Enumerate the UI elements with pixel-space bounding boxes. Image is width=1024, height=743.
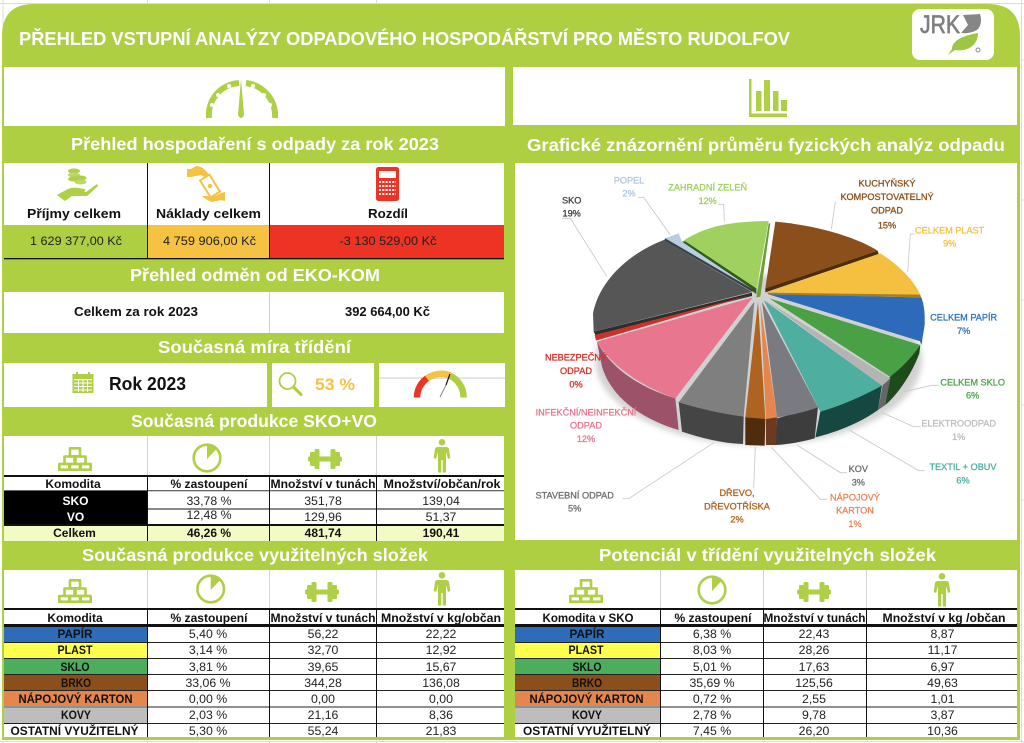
label: dřevo: DŘEVOTŘÍSKA xyxy=(704,501,771,511)
heading: graf: Grafické znázornění průměru fyzických analýz odpadu xyxy=(527,135,1005,155)
label: stavební odpad xyxy=(535,490,614,514)
icon: pie xyxy=(699,577,725,603)
table text xyxy=(45,477,501,540)
table text: 32,70 xyxy=(308,643,339,657)
table text: % zastoupení xyxy=(674,611,752,625)
label: elektroodpad xyxy=(921,419,996,442)
label: dřevo: 2% xyxy=(730,515,744,525)
label: nápojový karton: 1% xyxy=(848,519,862,529)
table text: BRKO xyxy=(61,676,91,690)
text: náklady value: 4 759 906,00 Kč xyxy=(163,234,256,248)
label: textil: 6% xyxy=(956,475,970,485)
table text: Množství v tunách xyxy=(764,611,866,625)
table text: 51,37 xyxy=(426,510,457,524)
table text: 5,30 % xyxy=(189,724,227,738)
table text: NÁPOJOVÝ KARTON xyxy=(530,691,644,706)
table: potenciál xyxy=(515,570,1017,738)
label: nebezpečný odpad: ODPAD xyxy=(560,366,592,376)
table text: 2,03 % xyxy=(189,708,227,722)
table text: PAPÍR xyxy=(570,626,605,641)
icon: magnifier xyxy=(280,373,301,394)
label: nápojový karton xyxy=(830,492,880,529)
table text: 15,67 xyxy=(426,660,457,674)
panel: EKO-KOM xyxy=(4,292,504,333)
label: SKO xyxy=(562,195,581,219)
leader lines xyxy=(562,197,939,499)
icon: pie xyxy=(197,576,224,602)
heading: využitelné složky: Současná produkce využitelných složek xyxy=(82,545,428,565)
label: infekční odpad xyxy=(536,407,637,444)
table text: 35,69 % xyxy=(689,676,735,690)
label: kuchyňský odpad: KOMPOSTOVATELNÝ xyxy=(840,192,934,202)
table text: 21,16 xyxy=(308,708,339,722)
label: kuchyňský odpad: 15% xyxy=(878,220,896,230)
label: sklo: 6% xyxy=(966,391,979,401)
panel: hospodaření xyxy=(4,163,504,259)
table text: 9,78 xyxy=(802,708,826,722)
label: zahradní zeleň: ZAHRADNÍ ZELEŇ xyxy=(668,183,747,193)
table text: 6,97 xyxy=(931,660,955,674)
table text: 3,81 % xyxy=(189,660,227,674)
table text: 0,00 xyxy=(311,692,335,706)
table text: 0,00 % xyxy=(189,692,227,706)
table text: 33,06 % xyxy=(185,676,231,690)
table text: 8,36 xyxy=(429,708,453,722)
table text xyxy=(523,611,1006,738)
table text: 139,04 xyxy=(422,494,460,508)
table text: Množství v tunách xyxy=(270,611,376,625)
label: papír xyxy=(930,313,998,336)
label: infekční odpad: 12% xyxy=(577,434,595,444)
table text: NÁPOJOVÝ KARTON xyxy=(18,691,132,706)
label: dřevo xyxy=(704,488,771,525)
table text: 12,92 xyxy=(426,643,457,657)
table text: SKLO xyxy=(572,660,602,674)
table text: 11,17 xyxy=(928,643,958,657)
table text: 49,63 xyxy=(927,676,958,690)
icon: person xyxy=(434,439,450,472)
icon: pie xyxy=(194,445,220,471)
text: celkem label: Celkem za rok 2023 xyxy=(74,305,198,319)
heading: potenciál: Potenciál v třídění využitelných složek xyxy=(599,545,936,565)
table text: % zastoupení xyxy=(170,477,248,491)
label: elektroodpad: 1% xyxy=(952,432,965,442)
icon: gold bars xyxy=(570,580,602,602)
panel: gauge icon xyxy=(4,67,505,126)
label: nebezpečný odpad: 0% xyxy=(569,379,583,389)
table: současná produkce xyxy=(4,570,504,738)
table text: 136,08 xyxy=(422,676,460,690)
table text: 17,63 xyxy=(799,660,830,674)
icon: money hands xyxy=(187,166,225,202)
table text: Celkem xyxy=(53,526,96,540)
table text: Komodita xyxy=(47,611,103,625)
label: plast: 9% xyxy=(943,239,956,249)
table text: OSTATNÍ VYUŽITELNÝ xyxy=(10,723,138,738)
text: rok 2023: Rok 2023 xyxy=(109,374,186,394)
icon: bar chart xyxy=(749,79,787,117)
icon: dumbbell xyxy=(797,582,831,602)
label: kuchyňský odpad xyxy=(840,179,934,230)
table text: 39,65 xyxy=(308,660,339,674)
table text: 10,36 xyxy=(927,724,958,738)
table text: 56,22 xyxy=(308,627,339,641)
table text: 22,22 xyxy=(426,627,457,641)
table text: 190,41 xyxy=(423,526,460,540)
logo JRK xyxy=(912,9,994,60)
label: popel xyxy=(614,175,644,199)
table text: 0,00 xyxy=(429,692,453,706)
table text: 344,28 xyxy=(304,676,342,690)
label: sklo: CELKEM SKLO xyxy=(940,377,1005,387)
table text: 2,78 % xyxy=(693,708,731,722)
table text: 55,24 xyxy=(308,724,339,738)
table text: 351,78 xyxy=(304,494,342,508)
table text: % zastoupení xyxy=(170,611,248,625)
panel: pie chart xyxy=(515,163,1017,540)
table text: VO xyxy=(67,510,84,524)
table text: Komodita v SKO xyxy=(542,611,634,625)
table text: SKLO xyxy=(60,660,90,674)
label: nebezpečný odpad: NEBEZPEČNÝ xyxy=(545,353,607,363)
table text: 0,72 % xyxy=(693,692,731,706)
logo JRK: JRK xyxy=(920,11,960,39)
icon: person xyxy=(434,572,450,606)
table text: 5,01 % xyxy=(693,660,731,674)
icon: gold bars xyxy=(59,580,91,602)
table text: 3,87 xyxy=(931,708,955,722)
table text: Množství/občan/rok xyxy=(384,477,501,491)
table text: PLAST xyxy=(568,643,604,657)
icon: dumbbell xyxy=(305,582,339,602)
table text: 33,78 % xyxy=(186,494,232,508)
table text: KOVY xyxy=(572,708,602,722)
text: 53 %: 53 % xyxy=(315,375,355,394)
label: kuchyňský odpad: KUCHYŇSKÝ xyxy=(858,179,915,189)
label: zahradní zeleň: 12% xyxy=(699,196,717,206)
label: stavební odpad: STAVEBNÍ ODPAD xyxy=(535,490,614,500)
heading: produkce SKO+VO: Současná produkce SKO+VO xyxy=(131,411,377,431)
table text: 26,20 xyxy=(799,724,830,738)
table text: OSTATNÍ VYUŽITELNÝ xyxy=(523,723,651,738)
heading: hospodaření: Přehled hospodaření s odpady za rok 2023 xyxy=(71,134,439,154)
label: dřevo: DŘEVO, xyxy=(719,488,755,498)
label: textil: TEXTIL + OBUV xyxy=(929,462,997,472)
heading: EKO-KOM: Přehled odměn od EKO-KOM xyxy=(130,265,380,285)
text: příjmy value: 1 629 377,00 Kč xyxy=(30,234,122,248)
icon: calculator xyxy=(376,167,399,201)
table text: 8,03 % xyxy=(693,643,731,657)
table text: 7,45 % xyxy=(693,724,731,738)
table text: 6,38 % xyxy=(693,627,731,641)
label: SKO: SKO xyxy=(562,195,581,205)
table text: SKO xyxy=(62,494,89,508)
icon: speedometer xyxy=(209,79,275,118)
text: rozdíl label: Rozdíl xyxy=(368,207,408,221)
label: SKO: 19% xyxy=(563,209,581,219)
table text: KOVY xyxy=(61,708,91,722)
table text: 5,40 % xyxy=(189,627,227,641)
table text xyxy=(10,611,501,738)
table text: PLAST xyxy=(58,643,93,657)
panel: rok xyxy=(4,363,267,407)
table text: Komodita xyxy=(45,477,101,491)
table: SKO+VO xyxy=(4,436,504,541)
text: příjmy label: Příjmy celkem xyxy=(27,207,121,221)
panel: míra xyxy=(272,363,374,407)
table text: 22,43 xyxy=(799,627,830,641)
icon: dumbbell xyxy=(308,449,342,469)
label: zahradní zeleň xyxy=(668,183,747,206)
label: papír: 7% xyxy=(957,326,970,336)
table text: Množství v kg/občan xyxy=(381,611,501,625)
title: PŘEHLED VSTUPNÍ ANALÝZY ODPADOVÉHO HOSPODÁŘSTVÍ PRO MĚSTO RUDOLFOV xyxy=(19,28,791,49)
label: infekční odpad: ODPAD xyxy=(570,421,602,431)
table text: 129,96 xyxy=(304,510,342,524)
table text: 125,56 xyxy=(795,676,833,690)
icon: coins in hand xyxy=(57,168,98,201)
heading: míra třídění: Současná míra třídění xyxy=(158,337,352,357)
label: kov xyxy=(849,464,869,487)
label: stavební odpad: 5% xyxy=(568,504,581,514)
text: rozdíl value: -3 130 529,00 Kč xyxy=(340,234,436,248)
table text: 2,55 xyxy=(802,692,826,706)
table text: 1,01 xyxy=(931,692,955,706)
text: celkem value: 392 664,00 Kč xyxy=(345,305,430,319)
label: kov: 3% xyxy=(852,477,865,487)
table text: 3,14 % xyxy=(189,643,227,657)
label: nápojový karton: NÁPOJOVÝ xyxy=(830,492,880,502)
table text: 481,74 xyxy=(305,526,342,540)
table text: 28,26 xyxy=(799,643,830,657)
icon: person xyxy=(934,573,950,606)
label: nebezpečný odpad xyxy=(545,353,607,389)
pie top slices xyxy=(682,221,769,290)
label: textil xyxy=(929,462,997,485)
label: nápojový karton: KARTON xyxy=(836,506,874,516)
table text: 8,87 xyxy=(931,627,955,641)
label: kuchyňský odpad: ODPAD xyxy=(871,205,903,215)
label: popel: POPEL xyxy=(614,175,644,185)
label: popel: 2% xyxy=(622,189,636,199)
label: plast: CELKEM PLAST xyxy=(915,225,985,235)
label: sklo xyxy=(940,377,1005,401)
table text: 46,26 % xyxy=(187,526,231,540)
label: elektroodpad: ELEKTROODPAD xyxy=(921,419,996,429)
chart: gauge xyxy=(417,374,464,398)
icon: gold bars xyxy=(59,448,91,470)
label: infekční odpad: INFEKČNÍ/NEINFEKČNÍ xyxy=(536,407,637,417)
chart: 3D pie xyxy=(535,175,1005,529)
table text: PAPÍR xyxy=(58,626,93,641)
label: papír: CELKEM PAPÍR xyxy=(930,313,998,323)
table text: BRKO xyxy=(572,676,602,690)
table text: Množství v kg /občan xyxy=(882,611,1006,625)
panel: gauge xyxy=(379,363,505,407)
label: kov: KOV xyxy=(849,464,869,474)
icon: calendar xyxy=(72,372,94,393)
pie sides xyxy=(594,293,925,446)
table text: 21,83 xyxy=(426,724,457,738)
label: plast xyxy=(915,225,985,249)
panel: bar chart icon xyxy=(513,67,1017,125)
table text: 12,48 % xyxy=(186,508,232,522)
table text: Množství v tunách xyxy=(270,477,376,491)
text: náklady label: Náklady celkem xyxy=(156,207,261,221)
